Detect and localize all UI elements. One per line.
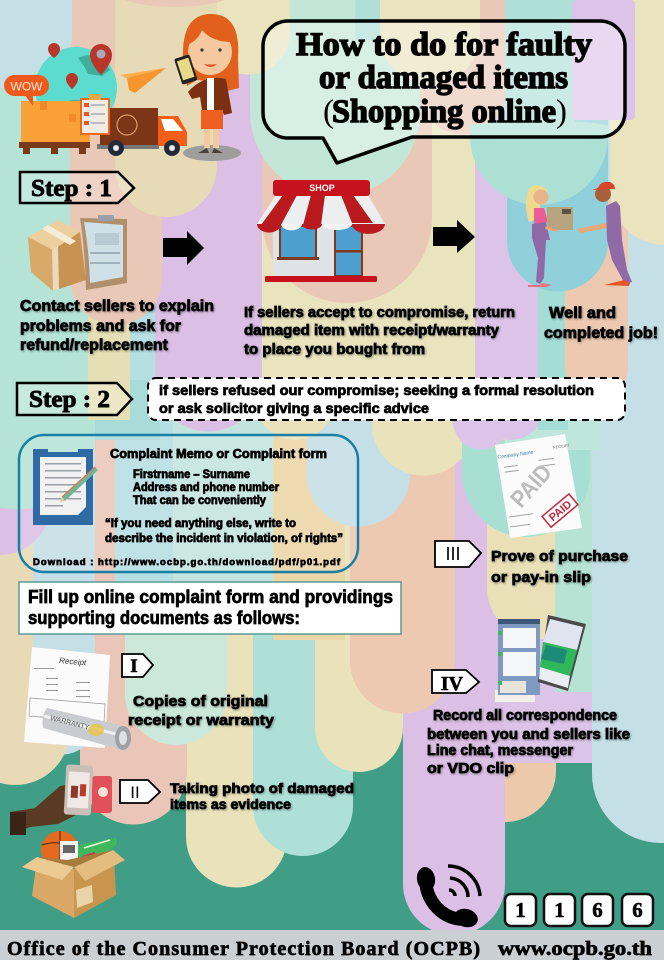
text: contact sellers: Contact sellers to explain [20, 298, 214, 315]
icon: paid document: PAID [505, 459, 558, 513]
hotline number 1166 [505, 894, 653, 926]
tag: III: III [445, 544, 461, 564]
icon: WOW speech bubble: WOW [10, 80, 43, 94]
text: proof of purchase: or pay-in slip [491, 569, 591, 586]
text: sellers accept: If sellers accept to compromise, return [244, 305, 515, 321]
text: copies of receipt: receipt or warranty [128, 712, 275, 729]
icon: paid document [495, 434, 582, 538]
arrow: step 1 to shop [163, 231, 204, 265]
dashed callout: refusal advice: or ask solicitor giving a specific advice [159, 400, 429, 416]
heading: fill up online complaint form [19, 582, 401, 634]
hotline number 1166: 6 [632, 898, 643, 922]
text: record correspondence: or VDO clip [427, 761, 514, 777]
title text: ( [323, 94, 334, 130]
icon: WOW speech bubble [4, 75, 49, 106]
arrow: shop to completed [433, 220, 475, 253]
icon: hand photographing cup [10, 764, 112, 835]
panel: complaint form [19, 435, 358, 572]
tag: IV [432, 670, 479, 695]
icon: open box of damaged goods [22, 831, 125, 918]
hotline number 1166: 6 [592, 898, 603, 922]
text: complaint heading and fields: Download : http://www.ocbp.go.th/download/pdf/p01.pdf [33, 557, 341, 568]
text: record correspondence: between you and sellers like [427, 727, 630, 743]
footer bar [0, 930, 664, 960]
icon: buyer receiving parcel from courier [526, 182, 632, 287]
text: taking photo: items as evidence [170, 796, 291, 812]
tag: I: I [130, 656, 138, 677]
text: taking photo: Taking photo of damaged [170, 780, 354, 796]
text: contact sellers [20, 298, 214, 354]
text: complaint heading and fields: That can be conveniently [133, 495, 267, 507]
step 2 tag: Step : 2 [29, 387, 110, 413]
icon: receipt with warranty roll [24, 647, 131, 750]
text: proof of purchase: Prove of purchase [491, 548, 628, 565]
text: record correspondence: Record all correspondence [433, 708, 617, 724]
icon: chat screenshots on phones [495, 615, 586, 702]
tag: II: II [130, 783, 140, 802]
text: completed job [544, 305, 658, 342]
title text: How to do for faulty [296, 27, 593, 63]
icon: receipt with warranty roll: WARRANTY [50, 715, 90, 732]
text: sellers accept: damaged item with receipt/warranty [244, 323, 499, 339]
footer bar: www.ocpb.go.th [498, 938, 652, 960]
text: contact sellers: problems and ask for [20, 318, 181, 335]
title text: or damaged items [319, 60, 568, 96]
text: completed job: Well and [549, 305, 616, 322]
footer bar: Office of the Consumer Protection Board (OCPB) [7, 938, 480, 960]
dashed callout: refusal advice: if sellers refused our compromise; seeking a formal resolution [159, 382, 594, 398]
icon: parcel and clipboard [28, 215, 127, 291]
text: taking photo [170, 780, 354, 812]
tag: I [122, 654, 153, 677]
text: complaint heading and fields [33, 447, 343, 568]
illustration: shipping globe, truck and woman with phone [4, 14, 241, 161]
icon: shop [257, 180, 385, 282]
text: record correspondence [427, 708, 630, 777]
heading: fill up online complaint form: supporting documents as follows: [28, 608, 300, 628]
text: contact sellers: refund/replacement [20, 337, 168, 354]
text: complaint heading and fields: Address and phone number [133, 482, 279, 494]
icon: form and pen [33, 449, 98, 525]
text: sellers accept [244, 305, 515, 358]
text: complaint heading and fields: Complaint Memo or Complaint form [110, 447, 327, 461]
title speech bubble [263, 21, 625, 163]
text: complaint heading and fields: “If you need anything else, write to [105, 518, 296, 530]
hotline number 1166: 1 [554, 898, 565, 922]
tag: IV: IV [441, 673, 464, 695]
icon: shop: SHOP [309, 183, 335, 193]
text: copies of receipt: Copies of original [133, 693, 268, 710]
text: completed job: completed job! [544, 325, 658, 342]
text: copies of receipt [128, 693, 275, 729]
title text: Shopping online [332, 94, 556, 130]
step 1 tag: Step : 1 [31, 176, 112, 202]
title text: ) [556, 94, 567, 130]
step 1 tag [20, 172, 134, 203]
text: record correspondence: Line chat, messenger [427, 743, 573, 759]
heading: fill up online complaint form: Fill up online complaint form and providings [28, 587, 393, 607]
title text [296, 27, 593, 130]
icon: phone handset with signal [415, 866, 480, 930]
figure: woman holding phone [174, 14, 241, 161]
dashed callout: refusal advice [148, 378, 625, 420]
tag: III [435, 541, 481, 567]
tag: II [120, 780, 160, 803]
text: complaint heading and fields: Firstrname – Surname [133, 469, 250, 481]
step 2 tag [17, 383, 132, 415]
text: proof of purchase [491, 548, 628, 586]
icon: paid document: RECEIPT [552, 442, 571, 450]
icon: receipt with warranty roll: Receipt [59, 656, 87, 667]
hotline number 1166: 1 [515, 898, 526, 922]
icon: paid document: Company Name [497, 450, 534, 461]
icon: paid document: PAID [547, 499, 574, 524]
text: complaint heading and fields: describe the incident in violation, of rights” [105, 533, 343, 545]
text: sellers accept: to place you bought from [244, 342, 425, 358]
